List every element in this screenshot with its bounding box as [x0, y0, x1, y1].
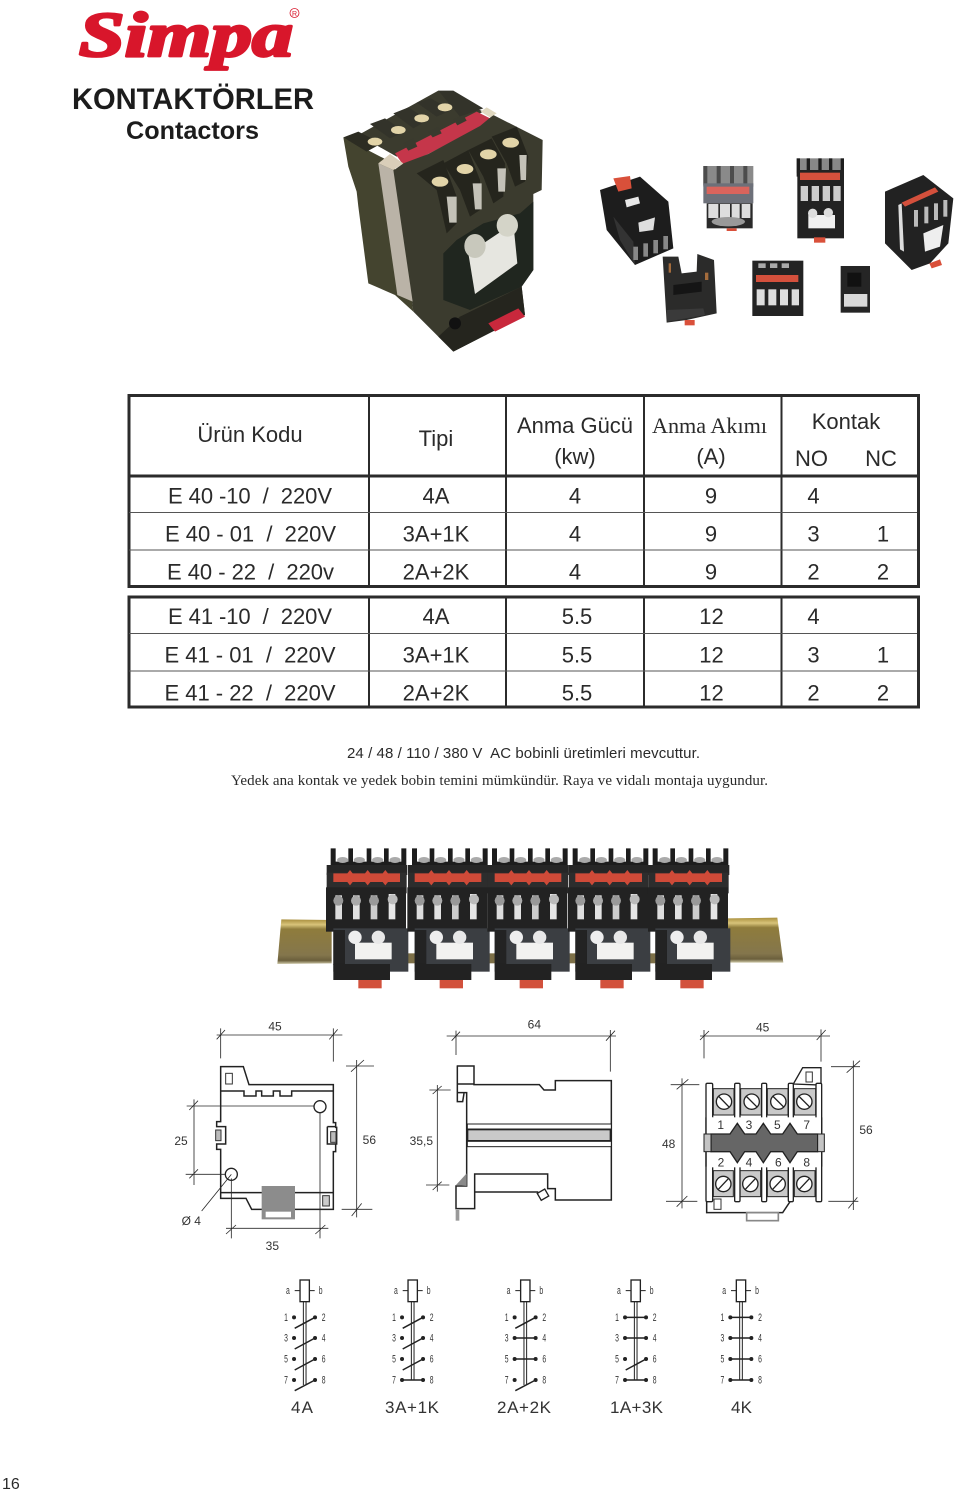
table header	[197, 409, 897, 471]
dimension labels: 35,5	[410, 1134, 433, 1148]
photo: main contactor	[343, 91, 543, 352]
schematic: 1A+3K: a	[617, 1284, 621, 1296]
table header: Tipi	[419, 426, 453, 451]
schematic: 2A+2K: 2	[542, 1311, 546, 1323]
table rows: E 41: E 41 - 01 / 220V	[164, 642, 336, 668]
schematic: 1A+3K: 3	[615, 1332, 619, 1344]
table rows: E 41: 5.5	[562, 642, 592, 668]
terminal numbers: 2	[718, 1156, 725, 1170]
table rows: E 40: 4	[569, 484, 581, 508]
schematic: 2A+2K: 3	[505, 1332, 509, 1344]
logo: Simpa: R	[292, 11, 297, 18]
schematic: 3A+1K: 2	[430, 1311, 434, 1323]
device outline	[216, 1067, 337, 1219]
table rows: E 40: 9	[705, 560, 717, 584]
schematic: 4A: 4	[322, 1332, 326, 1344]
dimension labels	[174, 1020, 376, 1253]
schematic: 4K: 5	[720, 1353, 724, 1365]
schematic: 2A+2K: 7	[505, 1374, 509, 1386]
dimension labels	[410, 1017, 541, 1148]
schematic: 4A: b	[319, 1284, 323, 1296]
terminal numbers: 6	[775, 1156, 782, 1170]
contactor variant: small module	[841, 266, 870, 313]
table rows: E 40: 2	[877, 560, 889, 584]
photo: contactors on DIN rail	[277, 848, 783, 988]
table rows: E 40: 4	[807, 484, 820, 508]
schematic: 4A	[284, 1280, 326, 1391]
schematic: 1A+3K: 8	[653, 1374, 657, 1386]
dimension labels: 25	[174, 1134, 188, 1148]
contactor variant: auxiliary front	[752, 261, 803, 316]
schematic: 4K: 3	[720, 1332, 724, 1344]
schematic: 1A+3K: 7	[615, 1374, 619, 1386]
schematic: 1A+3K: 1	[615, 1311, 619, 1323]
dimension labels: 35	[266, 1239, 279, 1253]
table header: NC	[865, 446, 897, 471]
schematic: 1A+3K: 4	[653, 1332, 657, 1344]
schematic: 4K: b	[755, 1284, 759, 1296]
contactor variant: tilted rear view	[600, 176, 673, 265]
table grid	[129, 395, 918, 707]
table rows: E 40: 4	[569, 560, 581, 584]
table rows: E 40: 2A+2K	[403, 560, 470, 584]
dimension labels: 56	[363, 1133, 376, 1147]
schematic: 2A+2K: 5	[505, 1353, 509, 1365]
terminal block	[704, 1068, 824, 1221]
schematic: 4K: a	[722, 1284, 727, 1296]
schematic: 3A+1K: a	[394, 1284, 398, 1296]
table rows: E 41: 2A+2K	[403, 680, 470, 706]
table rows: E 40: 9	[705, 484, 717, 508]
table rows: E 41: 3	[807, 642, 820, 668]
schematic: 4A: 7	[284, 1374, 288, 1386]
table rows: E 41: 2	[807, 680, 820, 706]
title	[72, 83, 314, 145]
table rows: E 41: 12	[699, 680, 724, 706]
schematic: 4A: 1	[284, 1311, 288, 1323]
table rows: E 40: 9	[705, 522, 717, 546]
schematic: 4A: 3	[284, 1332, 288, 1344]
table rows: E 41: 5.5	[562, 604, 592, 629]
table header: (kw)	[554, 444, 596, 469]
table header: Kontak	[812, 409, 881, 434]
table rows: E 40: 3A+1K	[403, 522, 470, 546]
terminal numbers: 7	[803, 1118, 810, 1132]
dimension labels: 45	[268, 1020, 282, 1034]
table rows: E 41: E 41 -10 / 220V	[168, 604, 332, 629]
schematic: 3A+1K: 7	[392, 1374, 396, 1386]
table rows: E 41: 12	[699, 604, 724, 629]
title: KONTAKTÖRLER	[72, 83, 314, 116]
table: product specifications	[129, 395, 918, 707]
terminal numbers: 4	[746, 1156, 753, 1170]
table rows: E 40: 4A	[423, 484, 450, 508]
table header: (A)	[696, 444, 726, 469]
schematic: 4K: 6	[758, 1353, 762, 1365]
table rows: E 40: 2	[807, 560, 820, 584]
dimension labels: 64	[528, 1017, 541, 1031]
drawing: side dimensions	[410, 1017, 616, 1221]
table rows: E 40: E 40 - 01 / 220V	[165, 522, 336, 546]
table header: NO	[795, 446, 828, 471]
schematic label: 4K: 4K	[731, 1398, 753, 1417]
table rows: E 41: 5.5	[562, 680, 592, 706]
terminal numbers: 3	[746, 1118, 753, 1132]
dimension labels	[662, 1020, 873, 1151]
terminal numbers	[717, 1118, 810, 1170]
table rows: E 41: 4A	[423, 604, 450, 629]
title: Contactors	[126, 117, 259, 145]
table header: Anma Akımı	[652, 413, 767, 438]
contactor variant: auxiliary block grey	[703, 166, 753, 231]
schematic: 3A+1K: 5	[392, 1353, 396, 1365]
schematic: 3A+1K: 3	[392, 1332, 396, 1344]
terminal numbers: 1	[717, 1118, 724, 1132]
note text: Yedek ana kontak ve yedek bobin temini mümkündür. Raya ve vidalı montaja uygundur.	[231, 773, 768, 789]
dimension lines	[426, 1030, 616, 1192]
dimension labels: Ø 4	[182, 1214, 201, 1228]
schematic: 2A+2K: 6	[542, 1353, 546, 1365]
schematic: 1A+3K: 6	[653, 1353, 657, 1365]
schematic: 4K	[720, 1280, 762, 1386]
schematic: 3A+1K	[392, 1280, 434, 1386]
schematic: 2A+2K: 1	[505, 1311, 509, 1323]
schematic: 2A+2K: 8	[542, 1374, 546, 1386]
table rows: E 40: 3	[807, 522, 820, 546]
contactor variant: open base	[663, 254, 717, 325]
schematic: 4K: 2	[758, 1311, 762, 1323]
schematic label: 3A+1K: 3A+1K	[385, 1398, 440, 1417]
schematic: 3A+1K: b	[427, 1284, 431, 1296]
dimension lines	[666, 1029, 860, 1210]
table rows: E 41: 3A+1K	[403, 642, 470, 668]
schematic: 4A: 6	[322, 1353, 326, 1365]
table rows: E 40: 1	[877, 522, 889, 546]
table rows: E 40: E 40 -10 / 220V	[168, 484, 332, 508]
schematic: 2A+2K	[505, 1280, 546, 1391]
contactor variant: front view	[797, 158, 844, 243]
schematic: 3A+1K: 6	[430, 1353, 434, 1365]
schematic: 4A: 5	[284, 1353, 288, 1365]
schematic: 4K: 8	[758, 1374, 762, 1386]
device side outline	[456, 1066, 611, 1221]
schematic: 4A: 8	[322, 1374, 326, 1386]
table rows: E 41	[164, 604, 889, 706]
schematic: 2A+2K: a	[507, 1284, 511, 1296]
schematic: 2A+2K: 4	[542, 1332, 546, 1344]
schematic label: 4A: 4A	[291, 1398, 314, 1417]
schematic: 1A+3K: 5	[615, 1353, 619, 1365]
schematic label: 2A+2K: 2A+2K	[497, 1398, 552, 1417]
table rows: E 41: 1	[877, 642, 889, 668]
terminal numbers: 8	[803, 1156, 810, 1170]
dimension labels: 48	[662, 1137, 676, 1151]
table rows: E 41: 12	[699, 642, 724, 668]
table rows: E 40	[165, 484, 889, 584]
table rows: E 41: E 41 - 22 / 220V	[164, 680, 336, 706]
schematic: 3A+1K: 8	[430, 1374, 434, 1386]
schematic: 4K: 1	[720, 1311, 724, 1323]
drawing: terminal dimensions	[662, 1020, 873, 1221]
table header: Ürün Kodu	[197, 422, 303, 447]
note text	[231, 745, 768, 789]
table rows: E 40: 4	[569, 522, 581, 546]
contactor variant: right perspective	[885, 175, 953, 270]
terminal numbers: 5	[774, 1118, 781, 1132]
logo: Simpa: Simpa	[79, 0, 293, 70]
schematic: 1A+3K: b	[650, 1284, 654, 1296]
schematic: 3A+1K: 1	[392, 1311, 396, 1323]
drawing: front dimensions	[174, 1020, 376, 1253]
dimension labels: 56	[859, 1123, 873, 1137]
schematic: 4K: 4	[758, 1332, 762, 1344]
photo: contactor variants	[600, 158, 953, 325]
schematic label: 1A+3K: 1A+3K	[610, 1398, 664, 1417]
schematic: 4A: 2	[322, 1311, 326, 1323]
schematic: 1A+3K	[615, 1280, 657, 1386]
dimension lines	[186, 1028, 374, 1238]
schematic: 4A: a	[286, 1284, 290, 1296]
table rows: E 41: 2	[877, 680, 889, 706]
dimension labels: 45	[756, 1020, 770, 1034]
schematic: 3A+1K: 4	[430, 1332, 434, 1344]
table rows: E 40: E 40 - 22 / 220v	[167, 560, 334, 584]
table header: Anma Gücü	[517, 413, 633, 438]
schematic: 4K: 7	[720, 1374, 724, 1386]
schematic: 2A+2K: b	[539, 1284, 543, 1296]
note text: 24 / 48 / 110 / 380 V AC bobinli üretimleri mevcuttur.	[347, 745, 700, 762]
table rows: E 41: 4	[807, 604, 820, 629]
schematic: 1A+3K: 2	[653, 1311, 657, 1323]
